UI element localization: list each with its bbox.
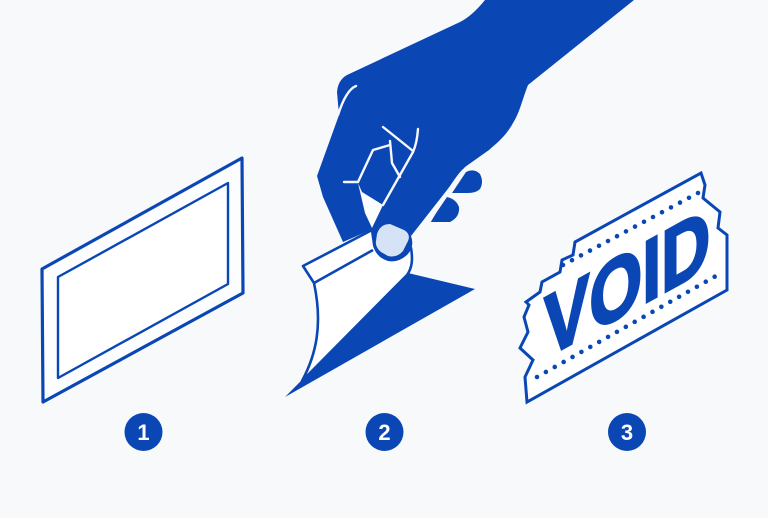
curled finger 1 [452,170,482,193]
blue triangle: exposed area under the peel [285,273,475,397]
panel 3: torn VOID label [520,173,727,402]
curled finger 2 [430,197,459,222]
flap fold line [314,250,373,283]
step badge 3 [608,413,646,451]
step badge 1 [124,413,162,451]
peeled label flap [302,230,412,381]
upper dotted line [563,193,698,265]
thumbnail [376,224,409,256]
step badge 1: 1 [137,420,150,445]
gap between index finger and palm [358,183,383,228]
knuckle and finger crease lines [338,86,465,221]
panel 2: hand peeling the label [285,0,634,397]
step badge 2: 2 [378,420,391,445]
lower dotted line [537,272,723,377]
step badge 3: 3 [621,420,633,445]
hand and arm silhouette [317,0,634,261]
VOID stamp text: VOID [544,188,710,378]
step badge 2 [366,413,404,451]
panel 1: blank rectangular label [42,158,243,402]
torn ticket outline [520,173,727,402]
